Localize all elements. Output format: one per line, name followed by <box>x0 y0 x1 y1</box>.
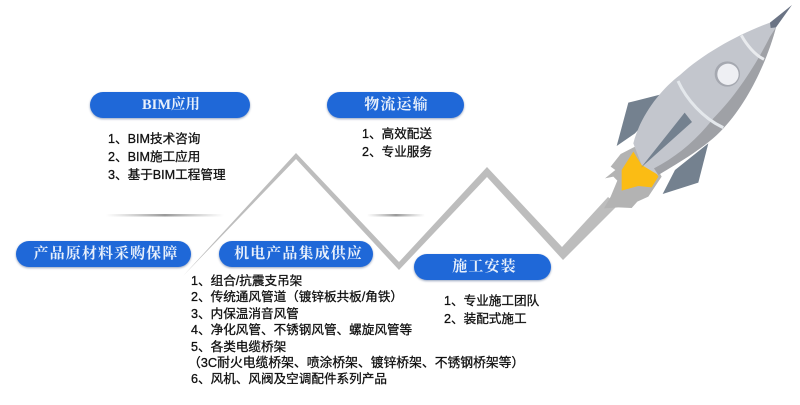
flame <box>622 152 658 191</box>
rocket <box>604 5 792 208</box>
text: BIM list: 3、基于BIM工程管理 <box>108 168 226 182</box>
text: logistics list: 2、专业服务 <box>362 145 432 159</box>
heading: 施工安装 <box>414 254 551 280</box>
rocket body <box>633 22 776 175</box>
heading: 产品原材料采购保障: 产品原材料采购保障 <box>34 246 178 262</box>
text: logistics list <box>362 127 432 159</box>
heading: 物流运输 <box>327 92 464 118</box>
text: MEP product list: 3、内保温消音风管 <box>191 307 299 321</box>
text: logistics list: 1、高效配送 <box>362 127 432 141</box>
text: MEP product list: 1、组合/抗震支吊架 <box>191 274 302 288</box>
text: BIM list <box>108 132 226 182</box>
text: MEP product list: 2、传统通风管道（镀锌板共板/角铁） <box>191 290 403 304</box>
text: installation list: 1、专业施工团队 <box>444 294 539 308</box>
text: installation list <box>444 294 539 326</box>
text: BIM list: 1、BIM技术咨询 <box>108 132 200 146</box>
text: MEP product list: 6、风机、风阀及空调配件系列产品 <box>191 372 387 386</box>
heading: BIM应用 <box>90 92 250 118</box>
heading: 机电产品集成供应 <box>219 241 373 267</box>
zigzag line <box>183 153 618 276</box>
lower band <box>678 81 723 128</box>
heading: 产品原材料采购保障 <box>16 241 191 267</box>
text: MEP product list: 5、各类电缆桥架 <box>191 340 286 354</box>
upper fin <box>617 93 665 146</box>
lower fin <box>663 143 708 194</box>
upper band <box>741 35 764 59</box>
text: BIM list: 2、BIM施工应用 <box>108 150 200 164</box>
text: MEP product list: （3C耐火电缆桥架、喷涂桥架、镀锌桥架、不锈钢桥架等） <box>188 355 524 370</box>
nose tip <box>770 5 792 28</box>
body fin slit <box>641 113 692 168</box>
heading: 机电产品集成供应: 机电产品集成供应 <box>234 246 363 262</box>
heading: BIM应用: BIM应用 <box>142 97 200 113</box>
text: MEP product list: 4、净化风管、不锈钢风管、螺旋风管等 <box>191 323 412 337</box>
heading: 施工安装: 施工安装 <box>452 259 517 275</box>
heading: 物流运输: 物流运输 <box>364 97 429 113</box>
text: installation list: 2、装配式施工 <box>444 312 527 326</box>
text: MEP product list <box>188 274 524 386</box>
porthole <box>715 61 740 87</box>
shadow: BIM <box>106 214 224 216</box>
body shaded side <box>654 27 776 175</box>
exhaust cloud <box>604 147 662 208</box>
shadow: logistics <box>367 214 425 216</box>
